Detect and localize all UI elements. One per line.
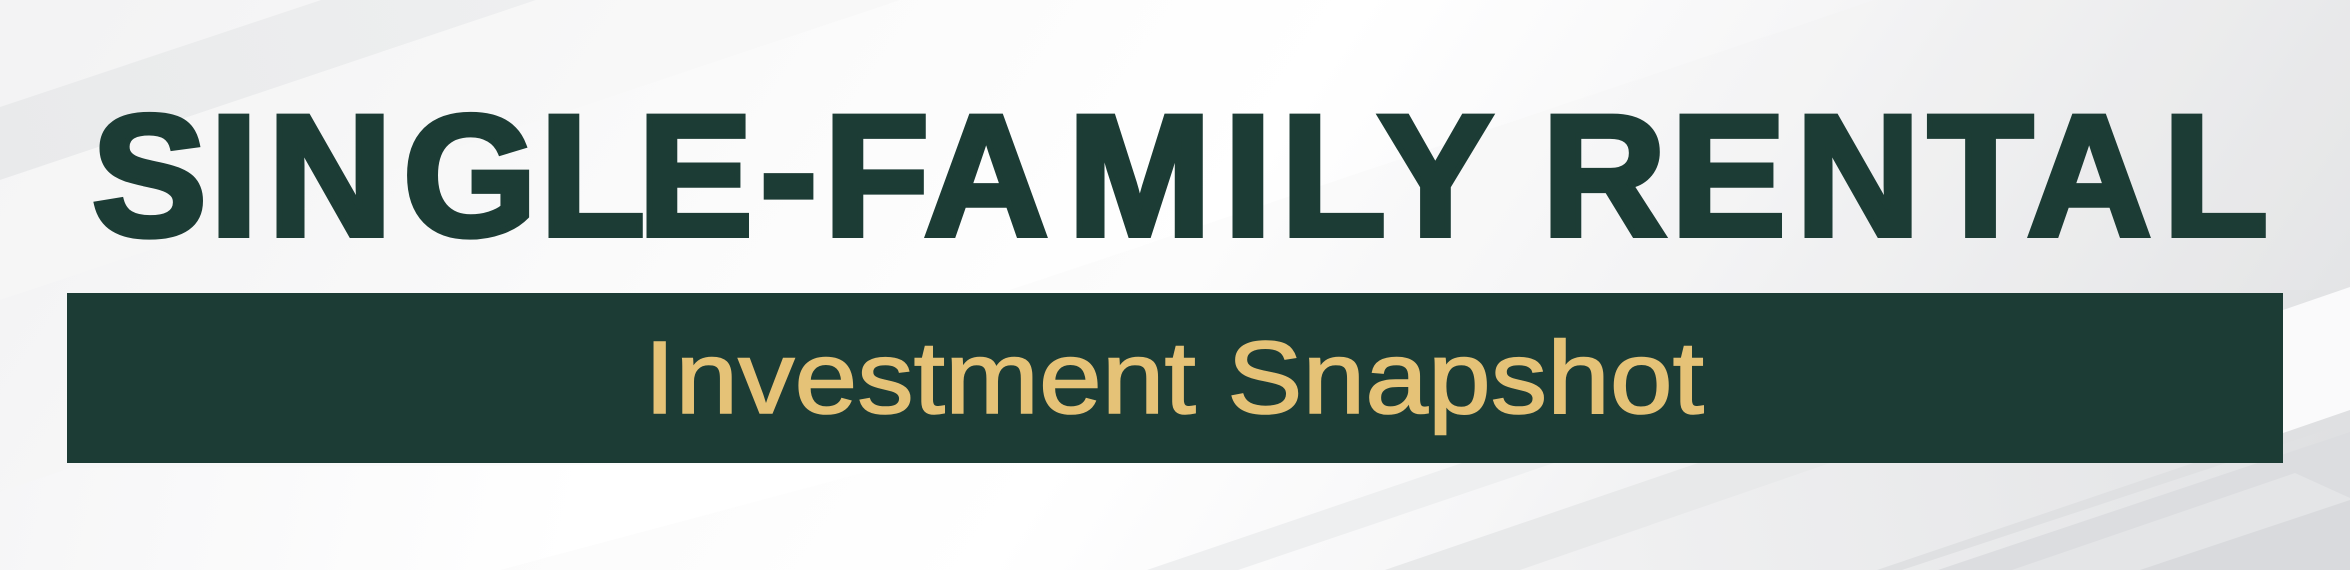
subtitle: Investment Snapshot: [644, 320, 1704, 435]
subtitle bar: [67, 293, 2283, 463]
title: SINGLE-FAMILY RENTAL: [92, 76, 2268, 272]
